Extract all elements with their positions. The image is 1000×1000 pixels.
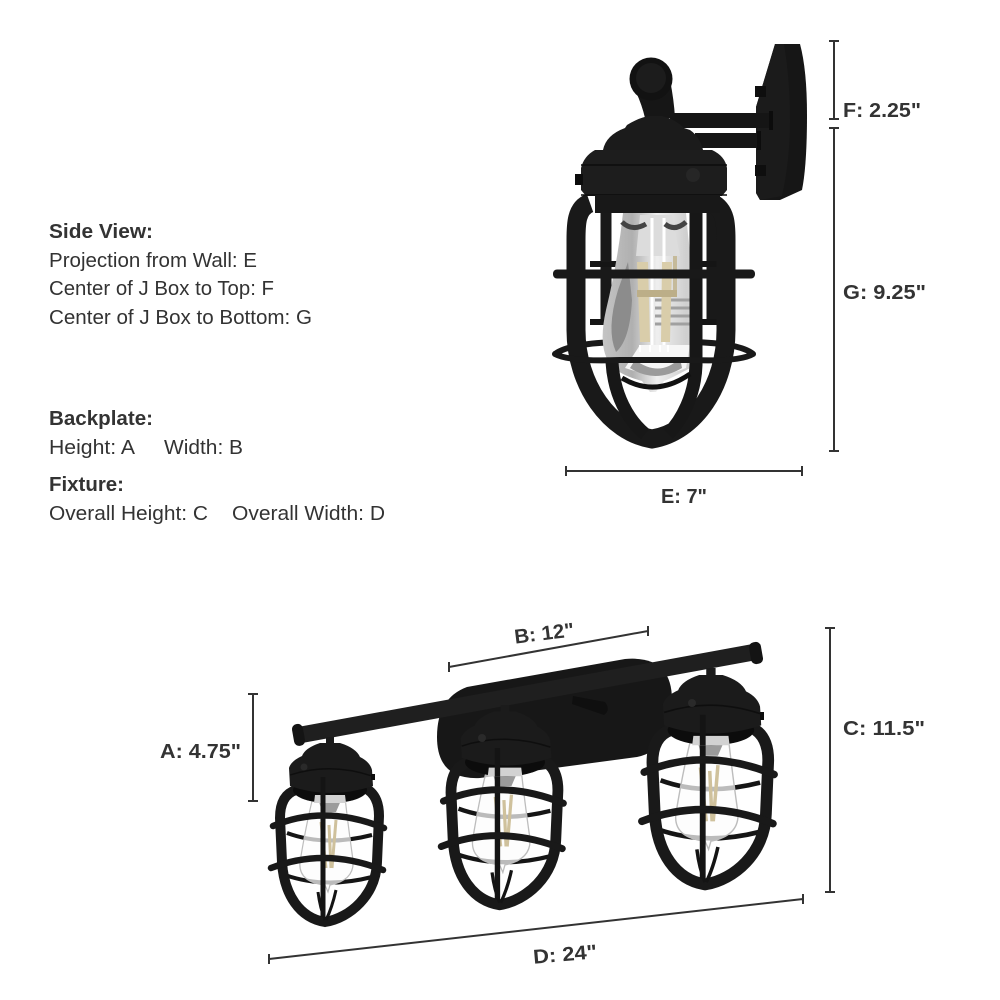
bracket G xyxy=(829,128,839,451)
heading: side view: Side View: xyxy=(49,221,153,243)
label A: A: 4.75" xyxy=(160,741,241,763)
bracket C xyxy=(825,628,835,892)
round finial xyxy=(630,58,672,100)
backplate post xyxy=(572,696,608,715)
bracket D xyxy=(269,894,803,964)
lower ring front xyxy=(555,354,753,360)
backplate face highlight xyxy=(756,44,790,200)
bracket E xyxy=(566,466,802,476)
text: center to bottom: Center of J Box to Bottom: G xyxy=(49,307,312,329)
side screw xyxy=(575,174,583,185)
band groove xyxy=(581,165,727,195)
back ring upper and lower xyxy=(590,264,735,322)
outer cage loop xyxy=(576,203,726,439)
dimension F xyxy=(829,41,921,122)
bar left cap xyxy=(291,723,306,747)
filament stem xyxy=(636,215,680,256)
dimension G xyxy=(829,128,926,451)
side view lantern xyxy=(553,44,807,439)
lower arm xyxy=(695,133,760,148)
text: backplate height: Height: A xyxy=(49,437,136,459)
bar right cap xyxy=(748,641,764,665)
arm end collar xyxy=(769,111,773,130)
label F: F: 2.25" xyxy=(843,100,921,122)
label E: E: 7" xyxy=(661,486,707,508)
label G: G: 9.25" xyxy=(843,282,926,304)
text: backplate width: Width: B xyxy=(164,437,243,459)
panel: specification text xyxy=(49,221,385,525)
dimension C xyxy=(825,628,925,892)
three light vanity fixture xyxy=(271,641,774,922)
text: center to top: Center of J Box to Top: F xyxy=(49,278,274,300)
shade collar xyxy=(595,195,720,213)
glass bulb xyxy=(603,213,702,392)
bulb cradle xyxy=(622,374,690,387)
bracket B xyxy=(449,626,648,672)
bottom inner bars xyxy=(612,362,645,434)
left inner bar xyxy=(600,205,612,262)
bulb reflections xyxy=(611,262,632,352)
text: overall height: Overall Height: C xyxy=(49,503,208,525)
bracket A xyxy=(248,694,258,801)
front cage xyxy=(553,195,755,439)
dimension D xyxy=(269,894,803,969)
band stud xyxy=(686,168,700,182)
back cage xyxy=(606,205,712,325)
text: projection from wall: Projection from Wall: E xyxy=(49,250,257,272)
dimension E xyxy=(566,466,802,508)
dimension B xyxy=(449,619,648,672)
left lantern xyxy=(271,737,384,922)
cross bar xyxy=(300,652,752,735)
filaments xyxy=(637,262,672,342)
lower ring back edge xyxy=(555,342,753,354)
wall backplate xyxy=(756,44,807,200)
dimension A xyxy=(160,694,258,801)
bulb glass xyxy=(603,213,702,392)
neck elbow xyxy=(636,80,675,118)
label B: B: 12" xyxy=(513,619,575,649)
label D: D: 24" xyxy=(532,941,598,969)
left lantern side screw xyxy=(371,774,375,780)
oval backplate xyxy=(437,659,672,778)
right lantern side screw xyxy=(760,712,764,720)
heading: fixture: Fixture: xyxy=(49,474,124,496)
bracket F xyxy=(829,41,839,119)
left lantern stud xyxy=(300,764,308,770)
label C: C: 11.5" xyxy=(843,718,925,740)
upper arm xyxy=(670,113,772,128)
shade band xyxy=(581,150,727,196)
lower arm collar xyxy=(757,131,761,150)
backplate screws xyxy=(755,86,766,176)
dome xyxy=(603,116,703,150)
finial face xyxy=(636,63,666,93)
text: overall width: Overall Width: D xyxy=(232,503,385,525)
middle lantern stud xyxy=(478,734,486,742)
heading: backplate: Backplate: xyxy=(49,408,153,430)
right lantern xyxy=(642,668,774,884)
right lantern stud xyxy=(688,699,696,707)
middle lantern xyxy=(441,705,563,905)
upper ring xyxy=(553,270,755,278)
